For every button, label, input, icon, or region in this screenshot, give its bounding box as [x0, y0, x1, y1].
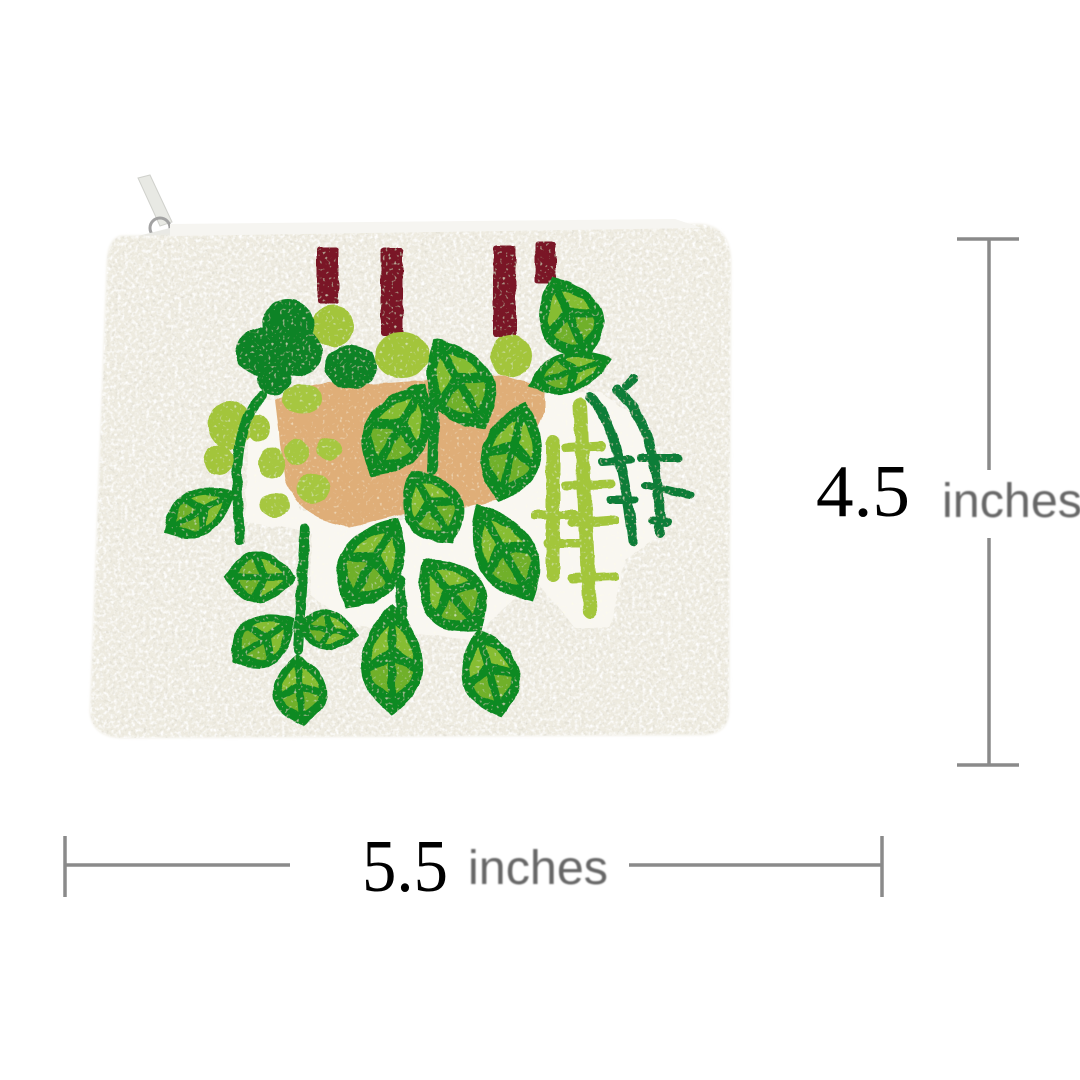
width label: inches — [468, 842, 608, 895]
zipper pull — [122, 175, 180, 244]
vertical dimension line — [957, 239, 1019, 765]
width label: 5.5 — [362, 826, 448, 908]
width label — [362, 826, 608, 908]
trailing string plant: light green — [535, 405, 615, 612]
white background beads behind plants — [245, 392, 664, 640]
horizontal dimension line — [65, 836, 882, 897]
light green foliage — [204, 305, 532, 475]
terracotta pot — [259, 375, 545, 527]
trailing string plant: dark green — [590, 378, 690, 541]
leaves — [152, 264, 618, 728]
clover leaf — [236, 299, 377, 395]
height label: inches — [942, 475, 1080, 528]
zipper tape — [170, 219, 702, 236]
height label: 4.5 — [816, 451, 910, 533]
pouch body — [90, 219, 731, 738]
height label — [816, 451, 1080, 533]
hanging straps — [317, 242, 556, 338]
vines — [237, 385, 435, 650]
